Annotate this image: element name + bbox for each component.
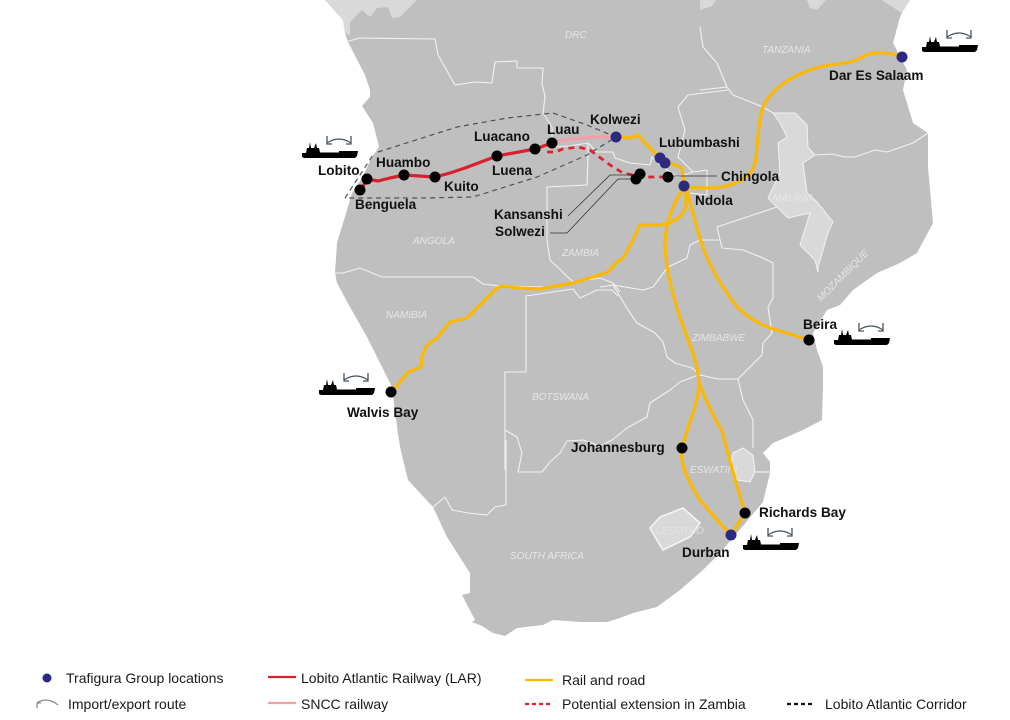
country labels: ZIMBABWE xyxy=(691,333,746,344)
rail and road routes xyxy=(392,53,902,535)
city labels: Walvis Bay xyxy=(347,405,419,420)
country labels: BOTSWANA xyxy=(532,392,589,403)
country labels: LESOTHO xyxy=(656,526,704,537)
Kenya area xyxy=(882,0,910,13)
city labels: Kolwezi xyxy=(590,112,641,127)
legend: import/export route: Import/export route xyxy=(68,696,186,712)
city labels: Kuito xyxy=(444,179,479,194)
Eswatini xyxy=(730,448,755,482)
Lobito Atlantic Railway xyxy=(361,143,552,190)
city labels: Luau xyxy=(547,122,579,137)
potential extension in Zambia xyxy=(547,147,668,177)
city labels: Lobito xyxy=(318,163,360,178)
Gabon and Congo area xyxy=(325,0,417,35)
city labels: Durban xyxy=(682,545,730,560)
SNCC railway xyxy=(552,137,616,143)
city labels: Luacano xyxy=(474,129,530,144)
country labels: MOZAMBIQUE xyxy=(815,248,872,304)
legend: rail and road: Rail and road xyxy=(562,672,645,688)
country labels: MALAWI xyxy=(773,193,812,204)
city labels: Kansanshi xyxy=(494,207,563,222)
Lesotho xyxy=(650,508,700,550)
legend: potential extension in Zambia: Potential extension in Zambia xyxy=(562,696,746,712)
country labels: ZAMBIA xyxy=(561,248,600,259)
city labels: Beira xyxy=(803,317,837,332)
country borders xyxy=(335,27,928,515)
ship icons with import/export arrows xyxy=(302,30,978,550)
Malawi xyxy=(768,113,833,272)
city labels: Lubumbashi xyxy=(659,135,740,150)
legend: Lobito Atlantic Railway: Lobito Atlantic Railway (LAR) xyxy=(301,670,482,686)
country labels: ANGOLA xyxy=(412,236,455,247)
map of southern Africa xyxy=(325,0,933,636)
land mass xyxy=(325,0,933,636)
legend: Trafigura Group locations: Trafigura Group locations xyxy=(66,670,223,686)
location markers xyxy=(354,52,908,540)
country labels: NAMIBIA xyxy=(386,310,427,321)
country labels: TANZANIA xyxy=(762,45,811,56)
Lobito Atlantic Corridor outline xyxy=(345,113,616,198)
city labels: Ndola xyxy=(695,193,733,208)
country labels xyxy=(386,30,872,562)
leader lines xyxy=(550,175,717,233)
country labels: ESWATINI xyxy=(690,465,738,476)
city labels: Dar Es Salaam xyxy=(829,68,923,83)
legend: Lobito Atlantic Corridor: Lobito Atlantic Corridor xyxy=(825,696,967,712)
city labels: Benguela xyxy=(355,197,417,212)
city labels: Solwezi xyxy=(495,224,545,239)
country labels: SOUTH AFRICA xyxy=(510,551,584,562)
country labels: DRC xyxy=(565,30,587,41)
city labels: Luena xyxy=(492,163,532,178)
city labels xyxy=(318,68,923,560)
city labels: Huambo xyxy=(376,155,430,170)
lakes at the north edge xyxy=(700,0,826,10)
legend: SNCC railway: SNCC railway xyxy=(301,696,388,712)
legend xyxy=(37,670,967,712)
city labels: Johannesburg xyxy=(571,440,665,455)
city labels: Chingola xyxy=(721,169,780,184)
legend: rail and road xyxy=(525,672,645,688)
city labels: Richards Bay xyxy=(759,505,846,520)
